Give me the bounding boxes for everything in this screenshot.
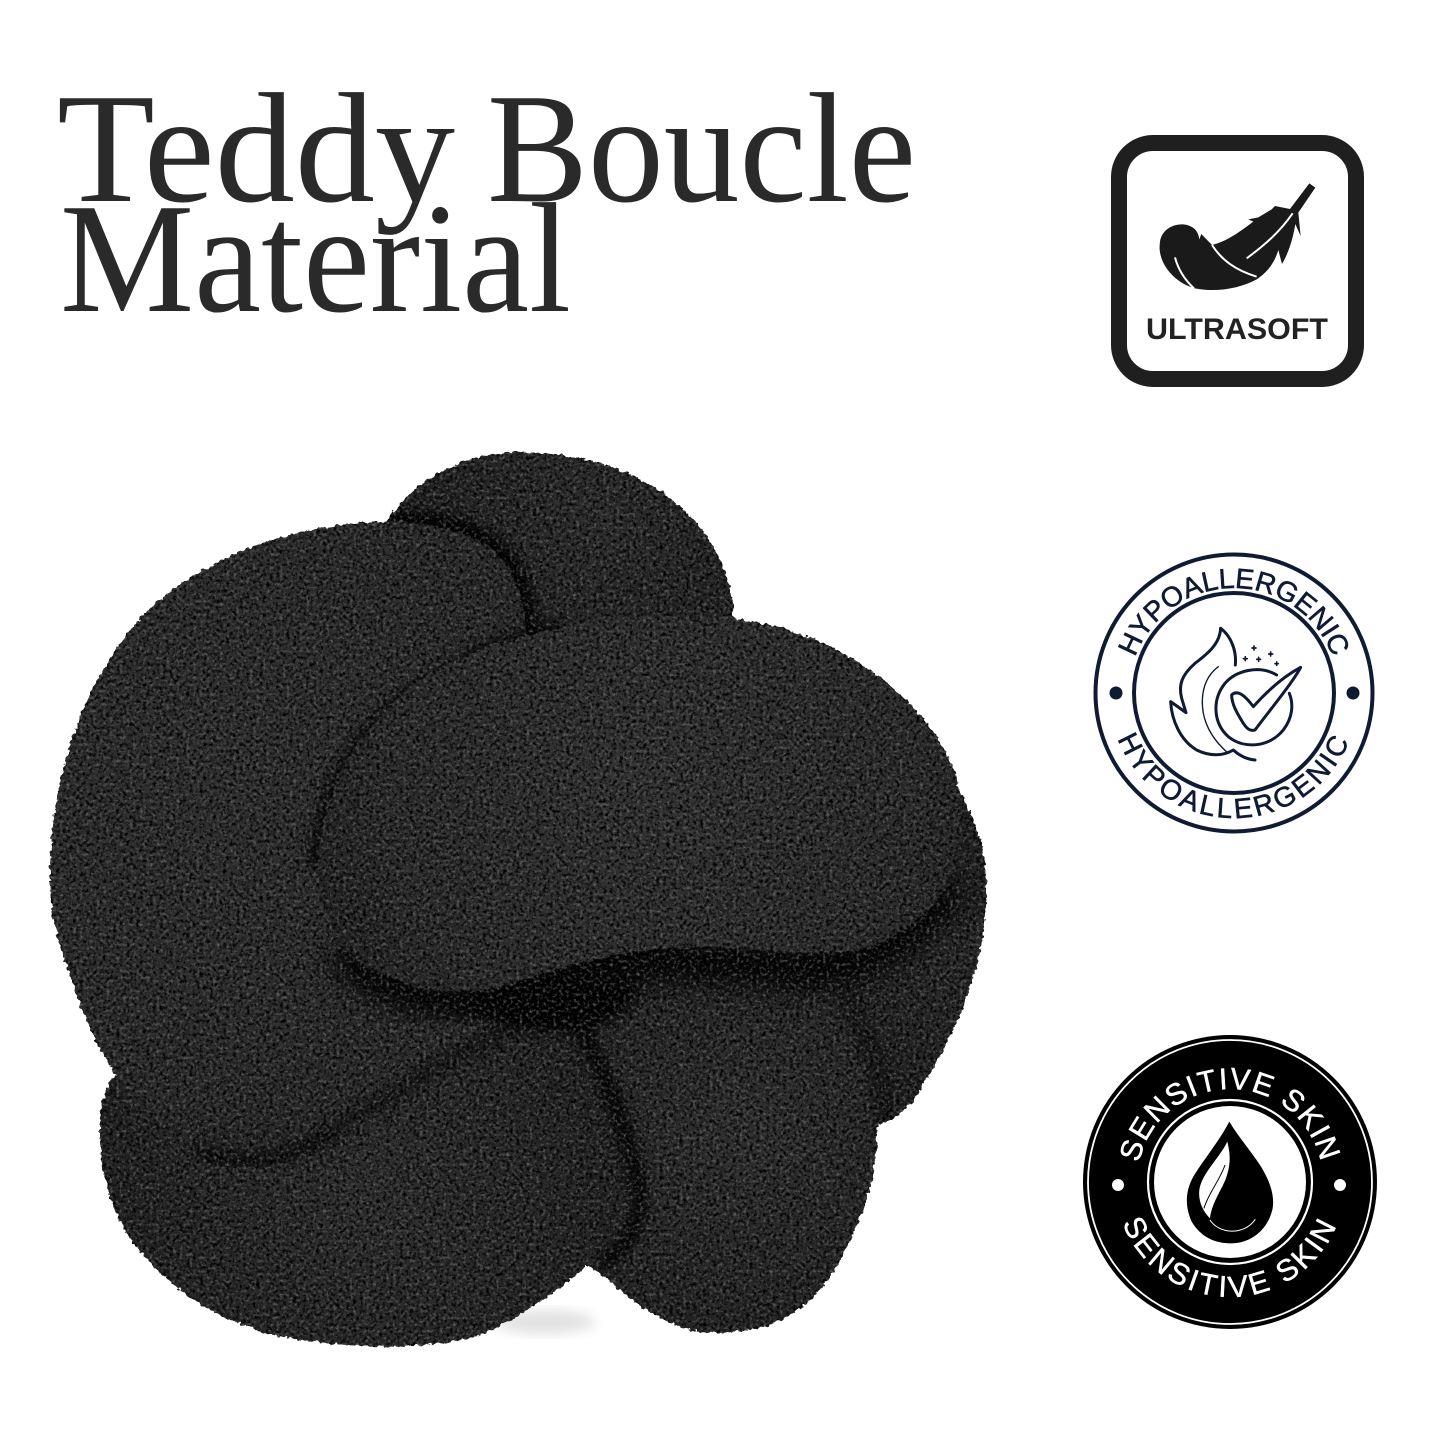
icon: water drop with leaf (1187, 1122, 1273, 1243)
title (57, 61, 916, 345)
badge label: ULTRASOFT (1146, 313, 1328, 346)
bottom arc label: HYPOALLERGENIC (1118, 732, 1347, 819)
title: Material (60, 171, 571, 345)
title: Teddy (57, 61, 455, 235)
top arc label: HYPOALLERGENIC (1118, 568, 1348, 656)
crease under top lobe and left lobe (382, 506, 540, 636)
badge: hypoallergenic (1094, 552, 1374, 834)
badge: ultrasoft (1119, 143, 1356, 379)
shadow cast by top tube (318, 630, 950, 1032)
icon: feather (1160, 183, 1315, 290)
soft floor shadow under knot (495, 1310, 595, 1334)
top arc label: SENSITIVE SKIN (1120, 1068, 1340, 1160)
icon: leaf with check mark (1171, 628, 1301, 760)
product photo: black boucle knot cushion (30, 430, 1010, 1370)
infographic canvas (48, 92, 1377, 1348)
crease shadows between lobes (200, 1000, 885, 1262)
badge: sensitive skin (1083, 1035, 1377, 1329)
title: Boucle (487, 61, 916, 235)
badge frame (1119, 143, 1356, 379)
bottom arc label: SENSITIVE SKIN (1124, 1218, 1336, 1298)
